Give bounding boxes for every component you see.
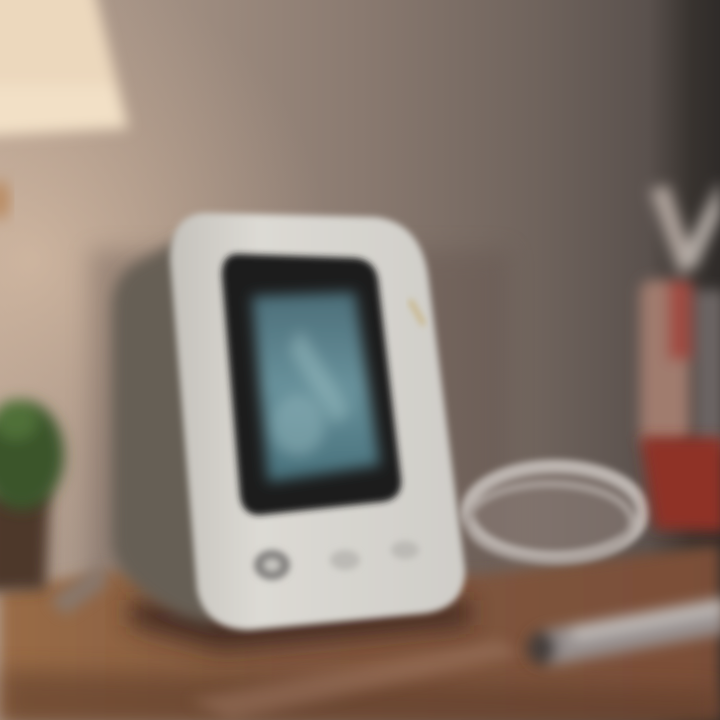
shadow <box>130 600 470 650</box>
pen cup <box>640 180 720 532</box>
device buttons <box>254 541 419 580</box>
screen display <box>252 292 380 482</box>
white cable coil <box>467 466 643 560</box>
pot <box>0 490 50 592</box>
plant in pot <box>0 400 64 592</box>
side panel <box>112 235 215 625</box>
lamp base glint <box>0 180 9 220</box>
device <box>112 213 470 650</box>
pens <box>640 180 720 450</box>
device foot on desk, left object <box>50 565 108 615</box>
lamp shade <box>0 0 128 136</box>
front body <box>170 213 465 630</box>
screen bezel <box>222 254 401 515</box>
foliage <box>0 400 64 510</box>
desk surface <box>0 545 720 720</box>
wall shadow behind device <box>90 250 510 600</box>
red cup <box>640 437 720 532</box>
bezel highlight <box>410 300 424 325</box>
stylus / pen on desk <box>527 597 720 665</box>
